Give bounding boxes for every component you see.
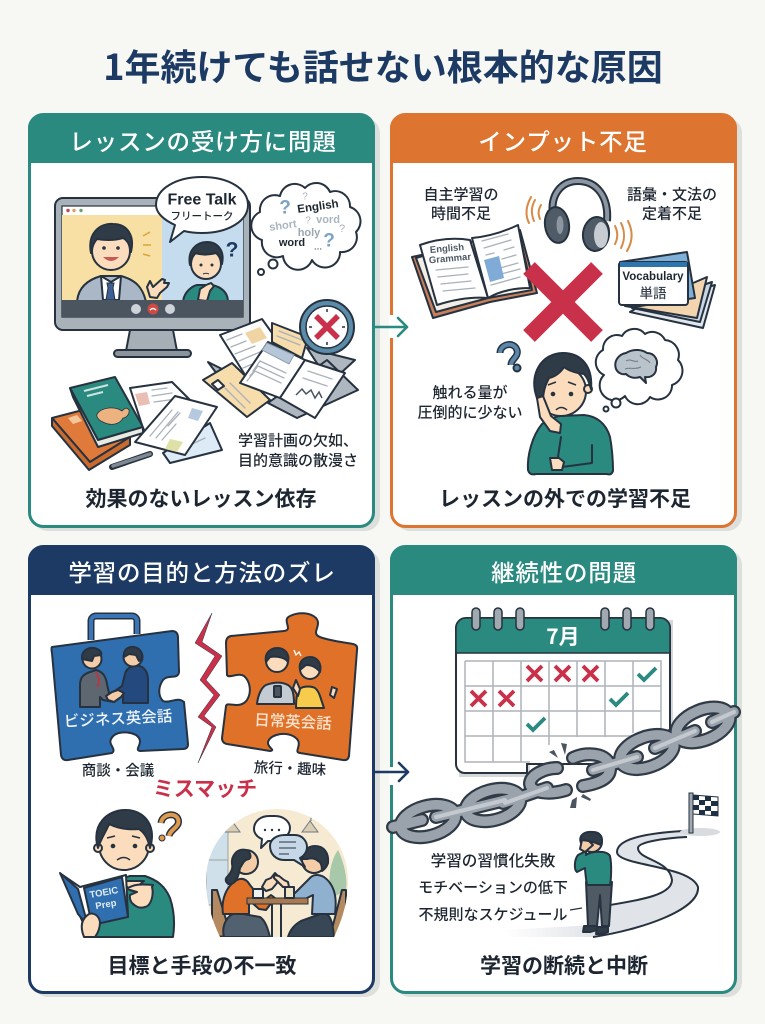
heading: continuity problem: 継続性の問題 <box>491 554 637 588</box>
text: lack of self-study time: 時間不足 <box>431 202 491 224</box>
text: habit, motivation, schedule: 不規則なスケジュール <box>419 904 567 924</box>
callout: free talk speech bubble: フリートーク <box>170 208 234 224</box>
icon: question mark: ? <box>226 238 238 262</box>
arrow: lesson problems to input shortage <box>374 315 407 338</box>
callout: confused thought cloud: ? <box>305 216 311 226</box>
caption: lesson reliance: 効果のないレッスン依存 <box>86 483 316 513</box>
heading: goal and method mismatch: 学習の目的と方法のズレ <box>68 554 336 588</box>
text: lack of study plan: 目的意識の散漫さ <box>238 450 358 470</box>
label: travel and hobbies: 旅行・趣味 <box>253 756 327 780</box>
text: habit, motivation, schedule: モチベーションの低下 <box>418 876 568 898</box>
icon: student with TOEIC book <box>60 810 174 937</box>
icon: video call monitor <box>55 198 250 357</box>
callout: thought cloud with brain <box>596 329 682 412</box>
callout: confused thought cloud: short <box>269 218 298 234</box>
callout: confused thought cloud: ? <box>302 192 308 202</box>
text: small exposure: 圧倒的に少ない <box>417 402 523 422</box>
text: small exposure <box>417 382 523 422</box>
icon: discouraged person <box>575 832 612 934</box>
text: lack of self-study time: 自主学習の <box>423 184 499 204</box>
label: business meetings: 商談・会議 <box>82 760 155 780</box>
icon: crack between puzzle pieces <box>195 613 222 763</box>
callout: confused thought cloud: holy <box>298 227 321 239</box>
icon: vocabulary flash cards: 単語 <box>640 282 667 302</box>
text: lack of self-study time <box>423 184 499 224</box>
icon: student with TOEIC book: Prep <box>95 898 118 912</box>
icon: July calendar <box>456 608 673 777</box>
arrow: goal mismatch to continuity <box>374 763 408 785</box>
icon: vocabulary flash cards <box>619 252 715 328</box>
text: small exposure: 触れる量が <box>432 382 508 402</box>
callout: free talk speech bubble: Free Talk <box>167 192 237 208</box>
callout: confused thought cloud: ? <box>323 230 335 252</box>
panel: input shortage <box>390 114 742 531</box>
icon: textbooks, handouts and pen <box>52 377 222 470</box>
icon: headphones <box>543 181 611 253</box>
text: lack of study plan: 学習計画の欠如、 <box>238 430 358 450</box>
label: business English: ビジネス英会話 <box>63 704 173 732</box>
caption: interrupted study: 学習の断続と中断 <box>480 950 648 980</box>
icon: open grammar book: English <box>429 242 465 256</box>
callout: confused thought cloud: ... <box>314 242 322 252</box>
callout: confused thought cloud: word <box>278 237 305 249</box>
callout: free talk speech bubble <box>156 177 248 242</box>
label: daily English: 日常英会話 <box>254 708 333 734</box>
text: vocabulary and grammar retention: 語彙・文法の <box>627 184 717 204</box>
title: 1年続けても話せない根本的な原因 <box>103 39 663 91</box>
text: habit, motivation, schedule <box>418 849 582 924</box>
icon: vocabulary flash cards: Vocabulary <box>622 271 684 283</box>
icon: break sparks <box>549 743 591 808</box>
icon: blue question mark <box>500 345 520 372</box>
callout: confused thought cloud <box>251 183 360 275</box>
panel: continuity problem <box>390 546 742 997</box>
icon: speech bubbles <box>254 816 307 867</box>
caption: mismatch of goal and means: 目標と手段の不一致 <box>108 950 296 980</box>
icon: cafe conversation scene <box>206 809 348 937</box>
text: vocabulary and grammar retention: 定着不足 <box>642 202 702 224</box>
icon: winding road to goal <box>503 831 698 937</box>
heading: lesson problems: レッスンの受け方に問題 <box>69 123 337 157</box>
icon: open grammar book: Grammar <box>428 252 472 266</box>
text: lack of study plan <box>238 430 358 470</box>
callout: confused thought cloud: vord <box>316 214 340 226</box>
icon: daily conversation puzzle piece <box>222 613 357 760</box>
icon: orange question mark <box>159 815 179 841</box>
icon: worried student <box>528 353 613 474</box>
icon: business puzzle piece <box>52 616 188 760</box>
text: vocabulary and grammar retention <box>627 184 717 224</box>
icon: July calendar: 7月 <box>546 621 580 651</box>
icon: scattered papers <box>203 319 358 418</box>
icon: sound waves <box>527 197 632 251</box>
icon: clock with cross <box>300 300 354 354</box>
callout: confused thought cloud: English <box>297 198 339 216</box>
icon: open grammar book <box>412 225 537 318</box>
callout: confused thought cloud: ? <box>279 198 291 218</box>
icon: calendar check marks <box>527 668 656 730</box>
icon: student with TOEIC book: TOEIC <box>89 885 119 901</box>
heading: input shortage: インプット不足 <box>478 123 648 157</box>
icon: checkered goal flag <box>680 793 720 836</box>
icon: red cross <box>529 268 597 336</box>
callout: confused thought cloud: ? <box>339 223 345 235</box>
panel: lesson problems <box>28 114 380 531</box>
caption: shortage outside lessons: レッスンの外での学習不足 <box>439 483 691 513</box>
text: habit, motivation, schedule: 学習の習慣化失敗 <box>431 849 556 871</box>
panel: goal and method mismatch <box>28 546 380 997</box>
icon: calendar cross marks <box>471 666 598 706</box>
icon: broken chain <box>393 701 735 843</box>
label: mismatch: ミスマッチ <box>153 773 257 803</box>
